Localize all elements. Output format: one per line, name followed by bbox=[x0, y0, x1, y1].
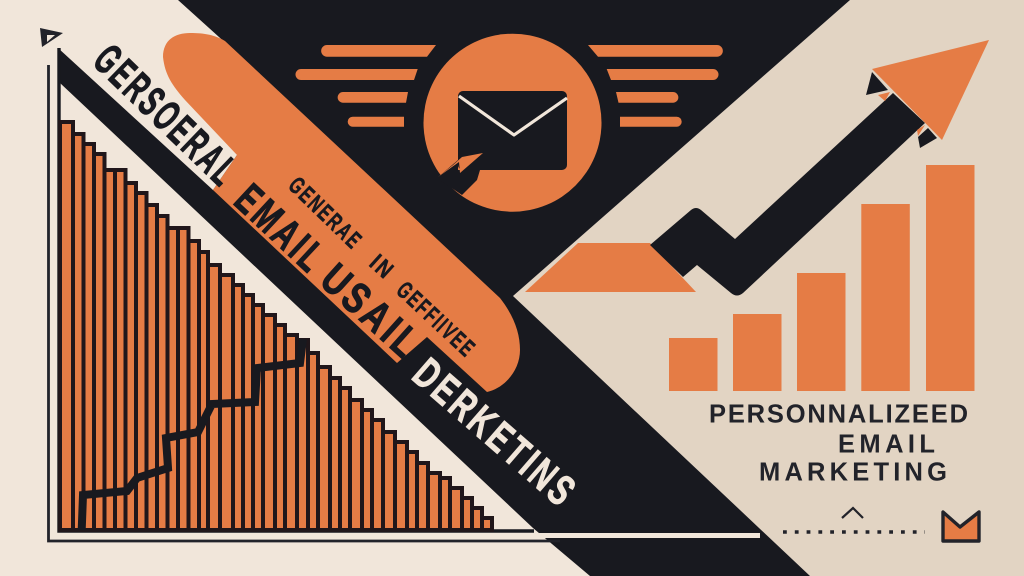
heading: diagonal cream word: DERKETINS bbox=[403, 349, 587, 517]
shape: orange trapezoid under arrow bbox=[525, 243, 696, 292]
panel: beige right background bbox=[513, 0, 1024, 576]
text: diagonal subtitle on pill bbox=[283, 172, 481, 363]
text: personalized email marketing: MARKETING bbox=[759, 459, 947, 487]
chart: descending striped bars bbox=[60, 122, 492, 530]
heading: diagonal dark title: USAIL bbox=[311, 255, 431, 369]
icon: speech tail cut bbox=[437, 160, 500, 195]
chart frame: inner vertical and baseline bbox=[59, 48, 534, 531]
decoration: dotted line bbox=[783, 530, 925, 534]
text: diagonal subtitle on pill: IN bbox=[364, 249, 400, 286]
icon: small chevron bbox=[842, 508, 863, 518]
heading: diagonal dark title: GERSOERAL bbox=[84, 36, 248, 197]
icon: envelope body bbox=[458, 91, 567, 170]
arrow: orange head bbox=[872, 40, 989, 140]
panel: orange rounded diagonal pill bbox=[163, 33, 520, 392]
icon: left wing stripes bbox=[296, 45, 436, 127]
heading: diagonal dark title bbox=[84, 36, 431, 369]
text: diagonal subtitle on pill: GEFFIIVEE bbox=[391, 277, 481, 363]
arrow: orange chip left bbox=[878, 92, 890, 101]
icon: right wing stripes bbox=[588, 45, 723, 127]
text: personalized email marketing: PERSONNALIZEED bbox=[709, 401, 968, 429]
arrow: head barb right bbox=[918, 128, 937, 148]
divider: cream strip across dark band bbox=[530, 533, 760, 538]
icon: small axis arrow bbox=[40, 28, 63, 47]
icon: envelope flap bbox=[459, 96, 567, 135]
chart axis: vertical and horizontal lines bbox=[48, 65, 560, 541]
text: personalized email marketing: EMAIL bbox=[838, 431, 935, 459]
text: personalized email marketing bbox=[709, 401, 968, 487]
icon: email circle bbox=[424, 34, 602, 212]
icon: orange spark bbox=[438, 153, 483, 177]
panel: dark diagonal band and top triangle bbox=[58, 0, 850, 576]
chart: rising orange bars bbox=[669, 165, 974, 391]
arrow: rising arrow bbox=[650, 40, 989, 296]
arrow: head barb left bbox=[866, 72, 888, 95]
arrow: orange chip right bbox=[917, 125, 925, 136]
chart: rising jagged line bbox=[82, 339, 303, 530]
heading: diagonal dark title: EMAIL bbox=[225, 175, 336, 283]
icon: small M envelope bbox=[943, 512, 979, 541]
text: diagonal subtitle on pill: GENERAE bbox=[283, 172, 368, 255]
arrow: dark shaft bbox=[650, 93, 925, 296]
